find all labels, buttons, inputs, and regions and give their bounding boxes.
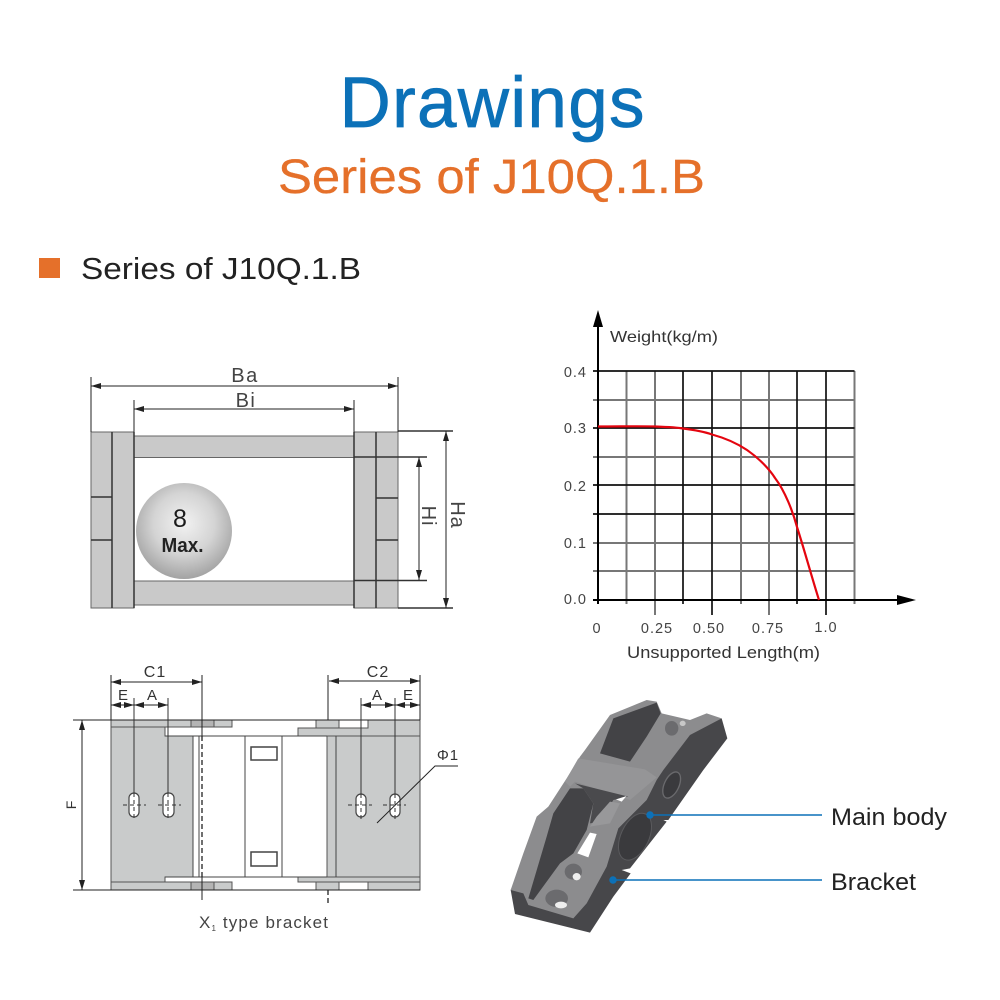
central frame: [73, 675, 420, 904]
data curve: [598, 426, 819, 600]
y axis tick labels: 0.4: [564, 365, 587, 381]
dimensions: left E and A: [111, 687, 168, 705]
caption: type bracket: [217, 913, 328, 932]
mounting holes: [565, 864, 582, 880]
centre window: [575, 783, 628, 823]
section heading: [39, 252, 361, 286]
sphere: 8 Max.: Max.: [162, 535, 204, 557]
dimensions: right A and E: A: [372, 687, 382, 704]
3D cable chain link: [511, 700, 727, 933]
dimension: Bi: Bi: [236, 390, 256, 412]
x axis: [593, 595, 916, 605]
dimensions: left E and A: A: [147, 687, 157, 704]
chart: weight vs unsupported length: [564, 310, 916, 662]
callout: Main body: Main body: [831, 804, 947, 831]
y axis tick labels: [564, 365, 587, 608]
mounting slots: [123, 698, 406, 821]
dimension: Ba: [91, 365, 398, 432]
sphere: 8 Max.: [136, 483, 232, 579]
dimension: C1: C1: [144, 664, 166, 681]
dimensions: left E and A: E: [118, 687, 128, 704]
x axis tick labels: 0.75: [752, 621, 784, 637]
lower dark opening: [528, 788, 593, 900]
dimensions: right A and E: E: [403, 687, 413, 704]
cross band: [565, 758, 657, 800]
dimension: F: F: [63, 801, 79, 809]
y axis title: Weight(kg/m): [610, 329, 718, 346]
dimension: Ba: Ba: [231, 365, 259, 387]
callout: Bracket: [609, 869, 916, 896]
x axis tick labels: 1.0: [814, 620, 838, 636]
section heading text: Series of J10Q.1.B: [81, 252, 361, 286]
bracket body: [111, 720, 420, 890]
cross-section drawing: [91, 365, 468, 608]
caption: X: [199, 913, 210, 932]
callout: Main body: [646, 804, 947, 831]
pivot circles: [612, 808, 658, 865]
callout: hole diameter: Φ1: [437, 747, 459, 764]
callout: Bracket: Bracket: [831, 869, 916, 896]
x axis tick labels: 0.50: [693, 621, 725, 637]
subtitle: Series of J10Q.1.B: [278, 151, 705, 204]
light top faces: [511, 700, 722, 918]
bracket drawing: X1 type: [63, 664, 459, 933]
dimension: C2: [329, 664, 420, 720]
icon: orange square bullet: [39, 258, 60, 278]
callout: hole diameter: [377, 747, 459, 823]
title: Drawings: [340, 64, 644, 143]
y axis tick labels: 0.1: [564, 536, 587, 552]
x axis tick labels: [592, 620, 838, 637]
x axis title: Unsupported Length(m): [627, 644, 820, 662]
y axis tick labels: 0.0: [564, 592, 587, 608]
dimension: Bi: [134, 390, 354, 432]
dark body: [511, 718, 727, 933]
sphere: 8 Max.: 8: [173, 505, 187, 533]
y axis: [593, 310, 603, 604]
side walls and rails: [91, 432, 398, 608]
y axis tick labels: 0.3: [564, 421, 587, 437]
grid lines: [593, 371, 854, 615]
x axis tick labels: 0.25: [641, 621, 673, 637]
dimension: C1: [111, 664, 202, 720]
dimension: Hi: Hi: [417, 506, 439, 526]
y axis tick labels: 0.2: [564, 479, 587, 495]
caption: 1: [211, 924, 216, 933]
dimension: Ha: Ha: [446, 501, 468, 529]
dimension: Hi: [417, 457, 439, 580]
dimensions: right A and E: [361, 687, 420, 705]
dimension: C2: C2: [367, 664, 389, 681]
x axis tick labels: 0: [592, 621, 602, 637]
upper dark opening: [600, 703, 661, 762]
